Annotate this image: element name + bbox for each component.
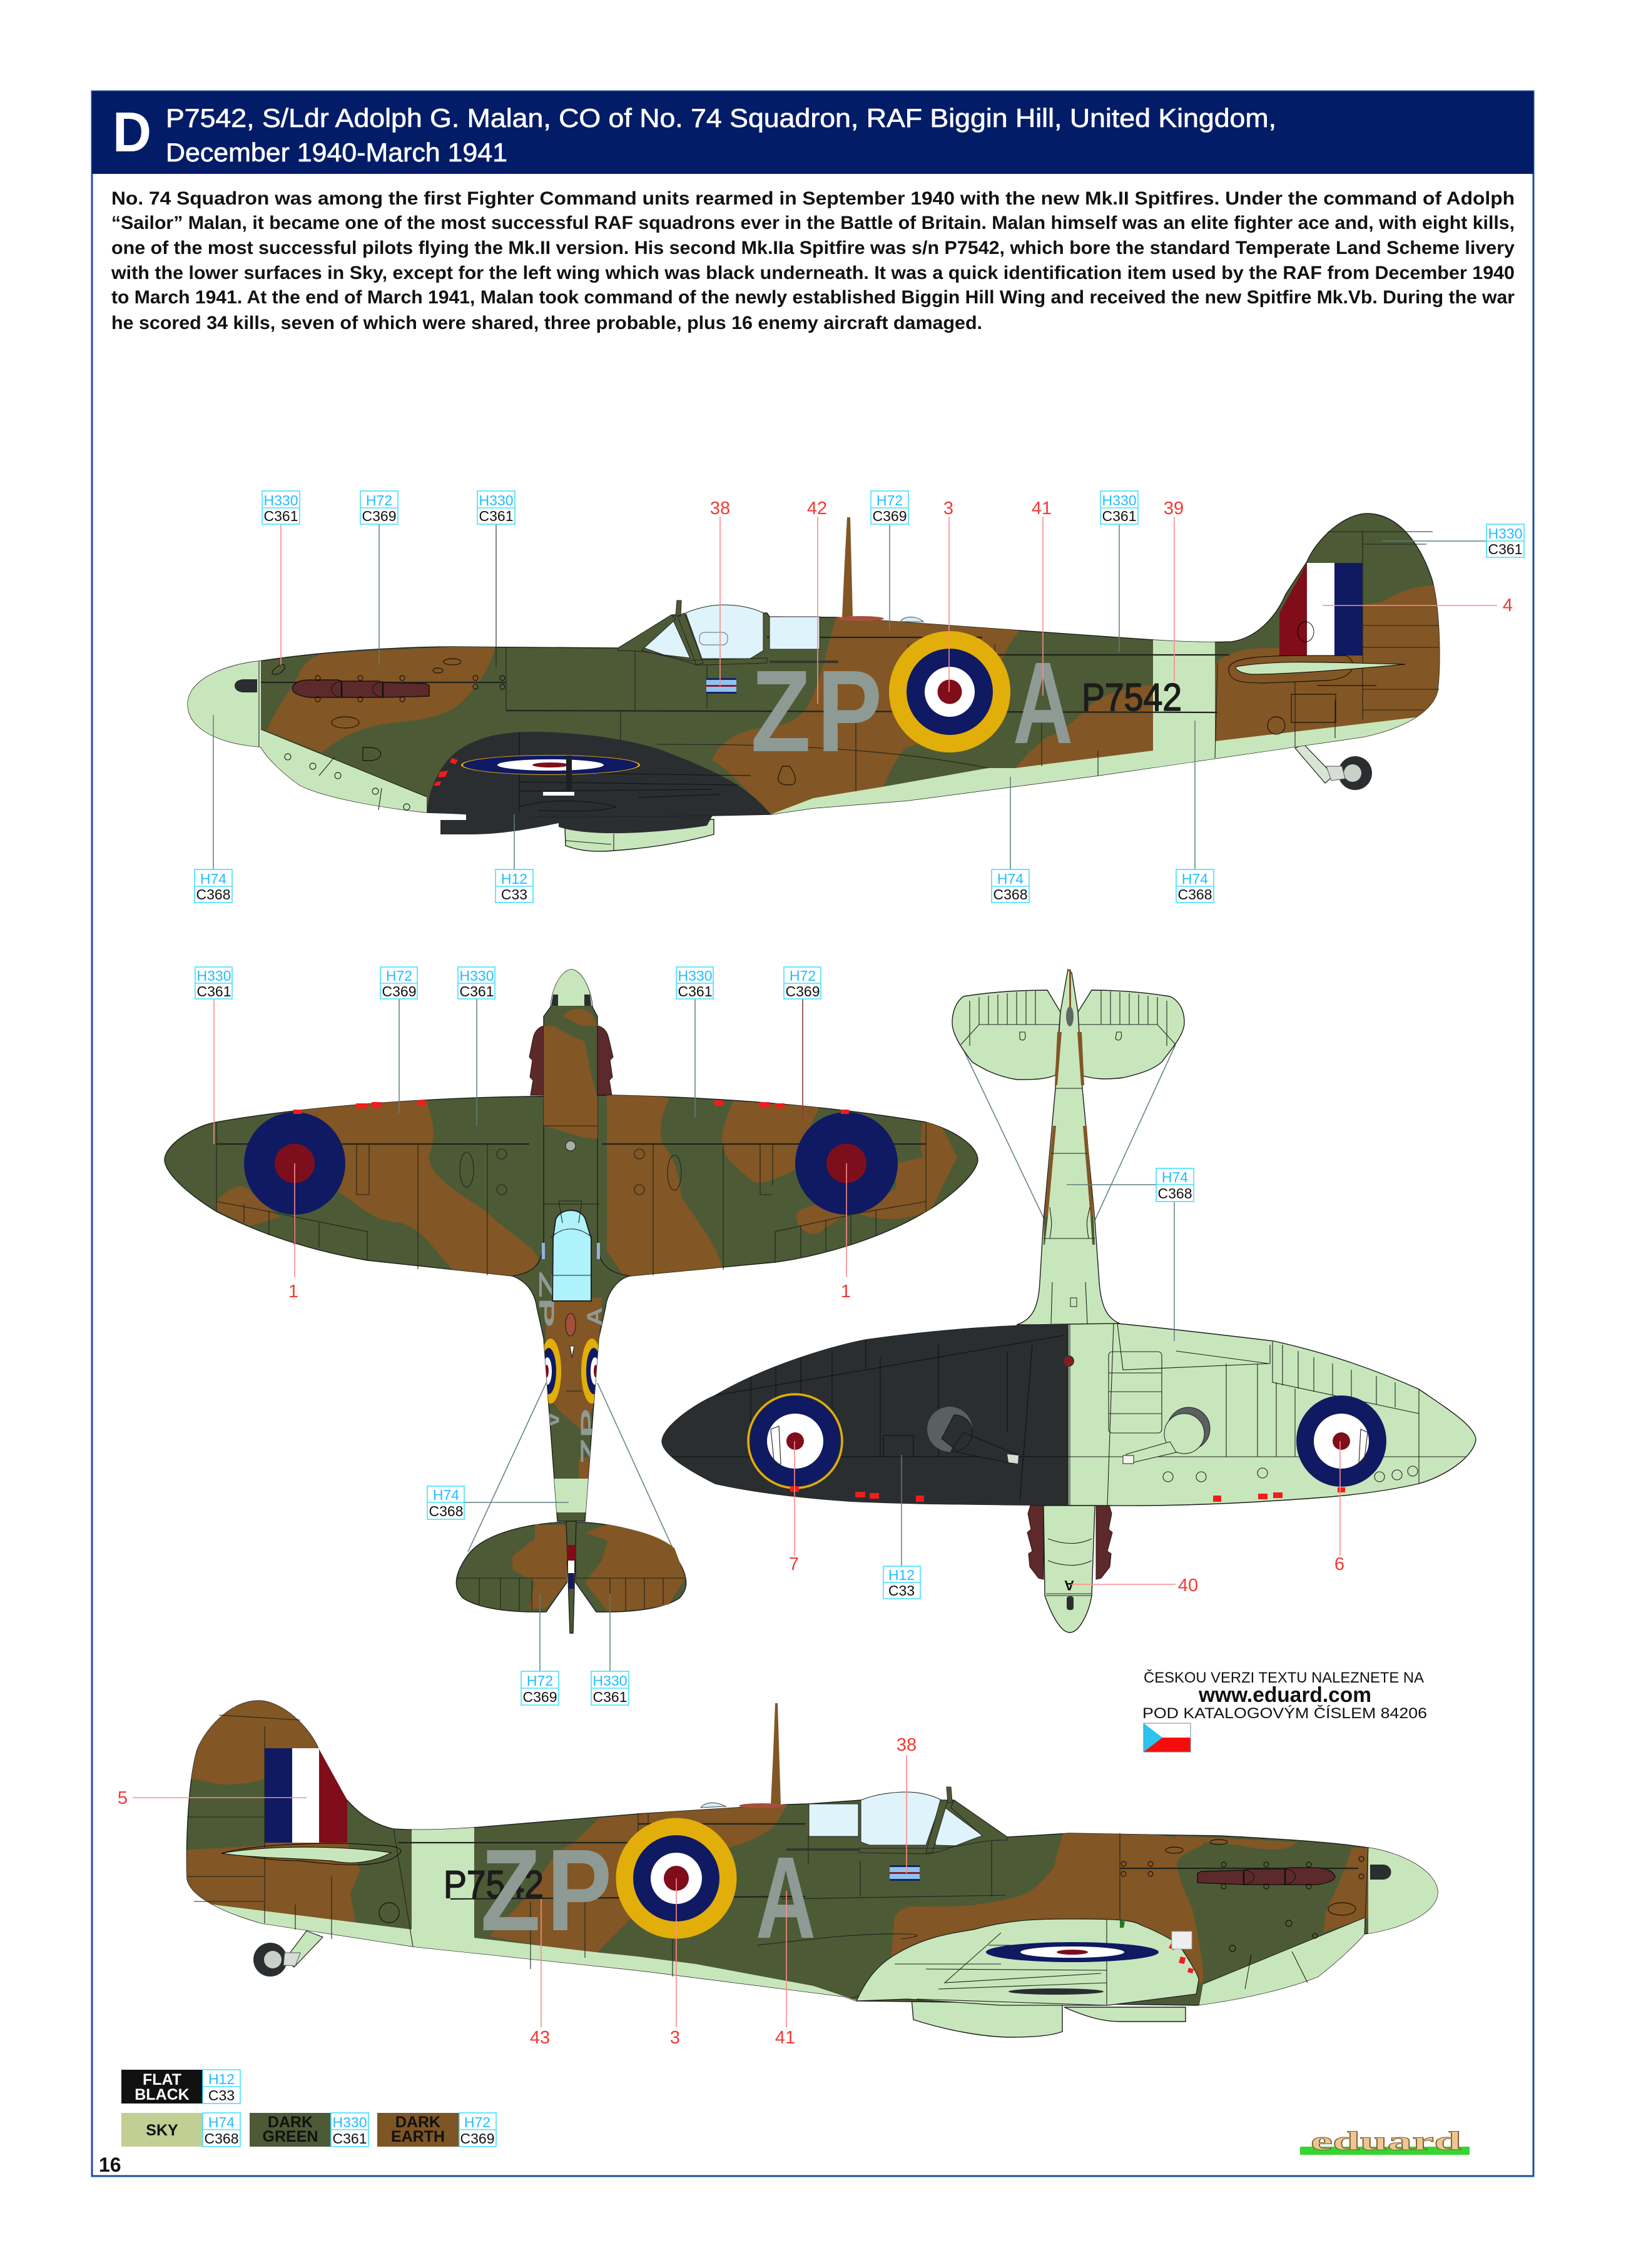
callout H330/C361 fin: H330	[1488, 525, 1522, 542]
callouts: top view	[195, 967, 851, 1705]
callout H330/C361	[195, 967, 232, 1144]
tailplane	[456, 1522, 686, 1612]
history text block: he scored 34 kills, seven of which were shared, three probable, plus 16 enemy aircraft damaged.	[111, 313, 982, 333]
callout H74/C368	[1176, 721, 1214, 903]
callout H330/C361: C361	[479, 508, 513, 524]
icon: oil cooler	[440, 810, 559, 834]
grey code letters ZP	[480, 1826, 612, 1955]
grey code letters ZP: P	[817, 647, 882, 776]
callout H72/C369: H72	[877, 492, 903, 509]
callout H12/C33: H12	[888, 1567, 915, 1583]
spinner stubs	[551, 995, 591, 1006]
canopy	[618, 600, 838, 665]
callout H74/C368: H74	[1162, 1169, 1188, 1185]
exhaust stacks	[1027, 1506, 1112, 1579]
grey code letters ZP	[751, 647, 882, 776]
tailplane bracing lines	[468, 1383, 674, 1552]
title	[166, 103, 1276, 167]
callout H330/C361: C361	[197, 983, 231, 1000]
callout H330/C361	[458, 967, 495, 1126]
history text block: No. 74 Squadron was among the first Fighter Command units rearmed in September 1940 with the new Mk.II Spitfires. Under the command of Adolph	[111, 188, 1515, 209]
callout H330/C361: H330	[678, 968, 712, 984]
swatch: dark green: DARK	[268, 2114, 313, 2131]
callout H72/C369	[380, 967, 417, 1113]
swatch: dark earth: H72	[464, 2114, 490, 2130]
exhaust stacks	[529, 1026, 613, 1095]
history text block: with the lower surfaces in Sky, except for the left wing which was black underneath. It was a quick identification item used by the RAF from December 1940	[111, 263, 1515, 283]
wing	[165, 1095, 978, 1276]
marking 41: 41	[775, 2028, 795, 2048]
callouts: right side profile	[118, 1735, 917, 2048]
title: December 1940-March 1941	[166, 138, 507, 167]
icon: exhaust stacks	[1197, 1868, 1335, 1885]
callout H74/C368: H74	[433, 1487, 459, 1503]
fuselage details	[543, 1126, 599, 1391]
callout H74/C368	[195, 715, 232, 903]
marking 1 left: 1	[288, 1282, 298, 1302]
wing roundels	[244, 1112, 898, 1215]
swatch: dark earth: C369	[460, 2130, 494, 2147]
Czech language note	[1142, 1669, 1427, 1752]
profile letter D: D	[113, 101, 151, 164]
gun patches	[790, 1486, 1345, 1502]
aircraft: underside view	[651, 969, 1476, 1633]
callout H74/C368	[427, 1486, 569, 1519]
swatch: flat black: FLAT	[143, 2071, 181, 2088]
icon: oil cooler	[1064, 2007, 1186, 2022]
callout H72/C369	[784, 967, 821, 1118]
title: P7542, S/Ldr Adolph G. Malan, CO of No. 74 Squadron, RAF Biggin Hill, United Kingdom,	[166, 103, 1276, 133]
callout H72/C369: C369	[523, 1689, 557, 1705]
callout H72/C369: C369	[362, 508, 396, 524]
marking 42: 42	[807, 499, 827, 519]
callout H72/C369: H72	[790, 968, 816, 984]
wing	[662, 1324, 1476, 1506]
swatch: dark green: GREEN	[263, 2128, 318, 2145]
callout H330/C361: H330	[1102, 492, 1136, 509]
code letters on spine: A	[539, 1410, 563, 1429]
gun patches	[293, 1100, 849, 1114]
callout H74/C368	[992, 777, 1029, 903]
callout H72/C369: C369	[786, 983, 820, 1000]
code letters on spine: ZP	[534, 1271, 558, 1327]
marking 3: 3	[943, 499, 953, 519]
marking 41: 41	[1032, 499, 1052, 519]
Czech language note: ČESKOU VERZI TEXTU NALEZNETE NA	[1144, 1669, 1425, 1686]
marking 4: 4	[1503, 595, 1513, 615]
rudder	[566, 1521, 576, 1633]
swatch: sky: SKY	[146, 2122, 178, 2139]
icon: exhaust stacks	[292, 680, 429, 697]
tailplanes	[952, 990, 1184, 1080]
callout H12/C33: C33	[501, 886, 527, 903]
callout H330/C361: C361	[460, 983, 494, 1000]
fuselage panel lines and earth edges	[1044, 969, 1095, 1324]
callout H330/C361: H330	[460, 968, 494, 984]
callout H74/C368: C368	[429, 1503, 463, 1519]
serial P7542: P7542	[1082, 676, 1182, 719]
callout H72/C369	[360, 491, 398, 665]
history text block	[111, 188, 1515, 333]
swatch: dark earth	[377, 2113, 496, 2147]
icon: radiator	[559, 813, 714, 851]
underwing roundel	[461, 755, 640, 775]
code letters on spine: ZP	[577, 1409, 601, 1465]
canopy	[786, 1787, 1007, 1854]
marking 38: 38	[710, 499, 730, 519]
marking 7: 7	[789, 1554, 799, 1574]
marking 39: 39	[1164, 499, 1184, 519]
callout H12/C33: H12	[501, 871, 527, 887]
grey code letters ZP: P	[547, 1826, 612, 1955]
fuselage roundel	[889, 631, 1010, 752]
callout H12/C33	[495, 814, 533, 903]
callout H72/C369: H72	[366, 492, 392, 509]
marking 3: 3	[670, 2028, 680, 2048]
Czech language note: www.eduard.com	[1198, 1683, 1371, 1707]
fuselage camouflage and markings	[539, 969, 602, 1512]
grey code letter A: A	[1013, 639, 1073, 768]
callout H330/C361: C361	[678, 983, 712, 1000]
callout H74/C368: C368	[196, 886, 230, 903]
callout H330/C361	[477, 491, 515, 667]
serial P7542: P7542	[444, 1863, 544, 1906]
callout H74/C368: H74	[997, 871, 1024, 887]
callout H72/C369: H72	[386, 968, 412, 984]
callout H72/C369	[871, 491, 908, 630]
callout H330/C361: H330	[197, 968, 231, 984]
callout H330/C361	[591, 1594, 629, 1705]
spinner stub	[235, 679, 257, 692]
marking 43: 43	[530, 2028, 550, 2048]
callout H74/C368	[1067, 1168, 1194, 1341]
marking 6: 6	[1334, 1554, 1344, 1574]
swatch: dark green: H330	[333, 2114, 367, 2130]
squadron leader pennant	[890, 1865, 920, 1881]
wing camouflage	[216, 1091, 957, 1279]
callout H74/C368: H74	[1182, 871, 1208, 887]
swatch: sky	[121, 2113, 240, 2147]
swatch: flat black: BLACK	[135, 2086, 190, 2103]
swatch: flat black	[121, 2070, 240, 2103]
icon: Czech flag	[1144, 1723, 1191, 1752]
starboard wing panel lines	[1069, 1323, 1476, 1506]
fuselage	[1017, 969, 1123, 1325]
marking 40: 40	[1178, 1576, 1198, 1596]
canopy	[542, 1201, 600, 1301]
marking 38: 38	[897, 1735, 917, 1755]
callout H330/C361: C361	[593, 1689, 627, 1705]
swatch: dark green	[250, 2113, 368, 2147]
tailplane	[221, 1847, 391, 1863]
page number: 16	[99, 2154, 121, 2176]
callout H330/C361: H330	[264, 492, 298, 509]
callout H74/C368: H74	[200, 871, 226, 887]
code letters on spine: A	[583, 1307, 607, 1326]
history text block: to March 1941. At the end of March 1941, Malan took command of the newly established Biggin Hill Wing and received the new Spitfire Mk.Vb. During the war	[111, 287, 1515, 308]
callout H12/C33: C33	[888, 1582, 915, 1599]
fuselage roundels	[544, 1339, 598, 1404]
callout H330/C361: H330	[479, 492, 513, 509]
header band	[92, 91, 1533, 174]
wing underside	[856, 1919, 1199, 2005]
aircraft: right side profile	[186, 1700, 1438, 2038]
aerial mast	[838, 517, 923, 622]
callout H74/C368: C368	[993, 886, 1027, 903]
history text block: “Sailor” Malan, it became one of the most successful RAF squadrons ever in the Battle of Britain. Malan himself was an elite fighter ace and, with eight kills,	[111, 213, 1515, 233]
colour legend	[121, 2070, 496, 2147]
underwing roundel	[986, 1942, 1159, 1962]
black port wing	[662, 1324, 1069, 1505]
swatch: flat black: C33	[208, 2087, 235, 2103]
callout H330/C361: H330	[593, 1673, 627, 1689]
callouts: left side profile, top row	[262, 491, 1524, 704]
nose	[1044, 1506, 1095, 1633]
nose: A	[1064, 1577, 1074, 1593]
rivets	[1121, 1840, 1364, 1989]
underwing roundels	[748, 1394, 1386, 1488]
callout H74/C368: C368	[1178, 886, 1212, 903]
aircraft: left side profile	[181, 514, 1445, 851]
eduard logo	[1300, 2127, 1470, 2156]
fuselage	[512, 969, 630, 1521]
rudder flash	[265, 1748, 347, 1843]
swatch: flat black: H12	[208, 2071, 235, 2087]
callout H330/C361	[676, 967, 713, 1118]
code letters on spine	[539, 1272, 602, 1462]
callout H72/C369	[521, 1594, 559, 1705]
swatch: dark green: C361	[333, 2130, 367, 2147]
callout H330/C361: C361	[1102, 508, 1136, 524]
grey code letters ZP: Z	[751, 647, 811, 776]
rudder flash	[1279, 563, 1363, 656]
tail wheel	[253, 1931, 323, 1977]
swatch: dark earth: DARK	[395, 2114, 440, 2131]
aircraft: top view	[165, 966, 978, 1633]
callout H330/C361: C361	[264, 508, 298, 524]
eduard logo: eduard	[1311, 2127, 1461, 2156]
wing underside	[427, 732, 771, 817]
callout H72/C369: C369	[382, 983, 416, 1000]
callouts: underside view	[789, 1168, 1344, 1599]
callout H12/C33	[883, 1455, 920, 1599]
tailplane bracing lines	[961, 1045, 1176, 1220]
history text block: one of the most successful pilots flying the Mk.II version. His second Mk.IIa Spitfire was s/n P7542, which bore the standard Temperate Land Scheme livery	[111, 238, 1515, 258]
tail wheel	[1295, 744, 1372, 790]
aerial mast	[701, 1703, 785, 1808]
callout H330/C361 fin: C361	[1488, 541, 1522, 557]
callouts: left side profile, bottom row	[195, 715, 1214, 903]
grey code letter A: A	[756, 1833, 816, 1963]
marking 1 right: 1	[841, 1282, 851, 1302]
grey code letters ZP: Z	[480, 1826, 541, 1955]
panel lines	[259, 532, 1439, 810]
callout H330/C361	[1100, 491, 1138, 652]
squadron leader pennant	[706, 678, 736, 694]
wing panel lines	[216, 1122, 926, 1275]
swatch: sky: H74	[208, 2114, 235, 2130]
fuselage roundel	[616, 1818, 737, 1939]
swatch: sky: C368	[205, 2130, 238, 2147]
callout H330/C361	[262, 491, 300, 665]
callout H330/C361 fin	[1383, 524, 1524, 557]
tailplane	[1236, 662, 1405, 674]
callout H74/C368: C368	[1158, 1185, 1192, 1202]
spinner stub	[1370, 1865, 1391, 1880]
icon: radiator	[912, 1998, 1062, 2037]
panel lines	[187, 1715, 1368, 1998]
callout H72/C369: H72	[527, 1673, 553, 1689]
Czech language note: POD KATALOGOVÝM ČÍSLEM 84206	[1142, 1704, 1427, 1722]
marking 5: 5	[118, 1788, 128, 1808]
swatch: dark earth: EARTH	[391, 2128, 445, 2145]
callout H72/C369: C369	[873, 508, 907, 524]
camouflage pattern	[186, 1701, 1438, 2005]
rivets	[272, 622, 1376, 810]
camouflage pattern	[181, 585, 1445, 832]
